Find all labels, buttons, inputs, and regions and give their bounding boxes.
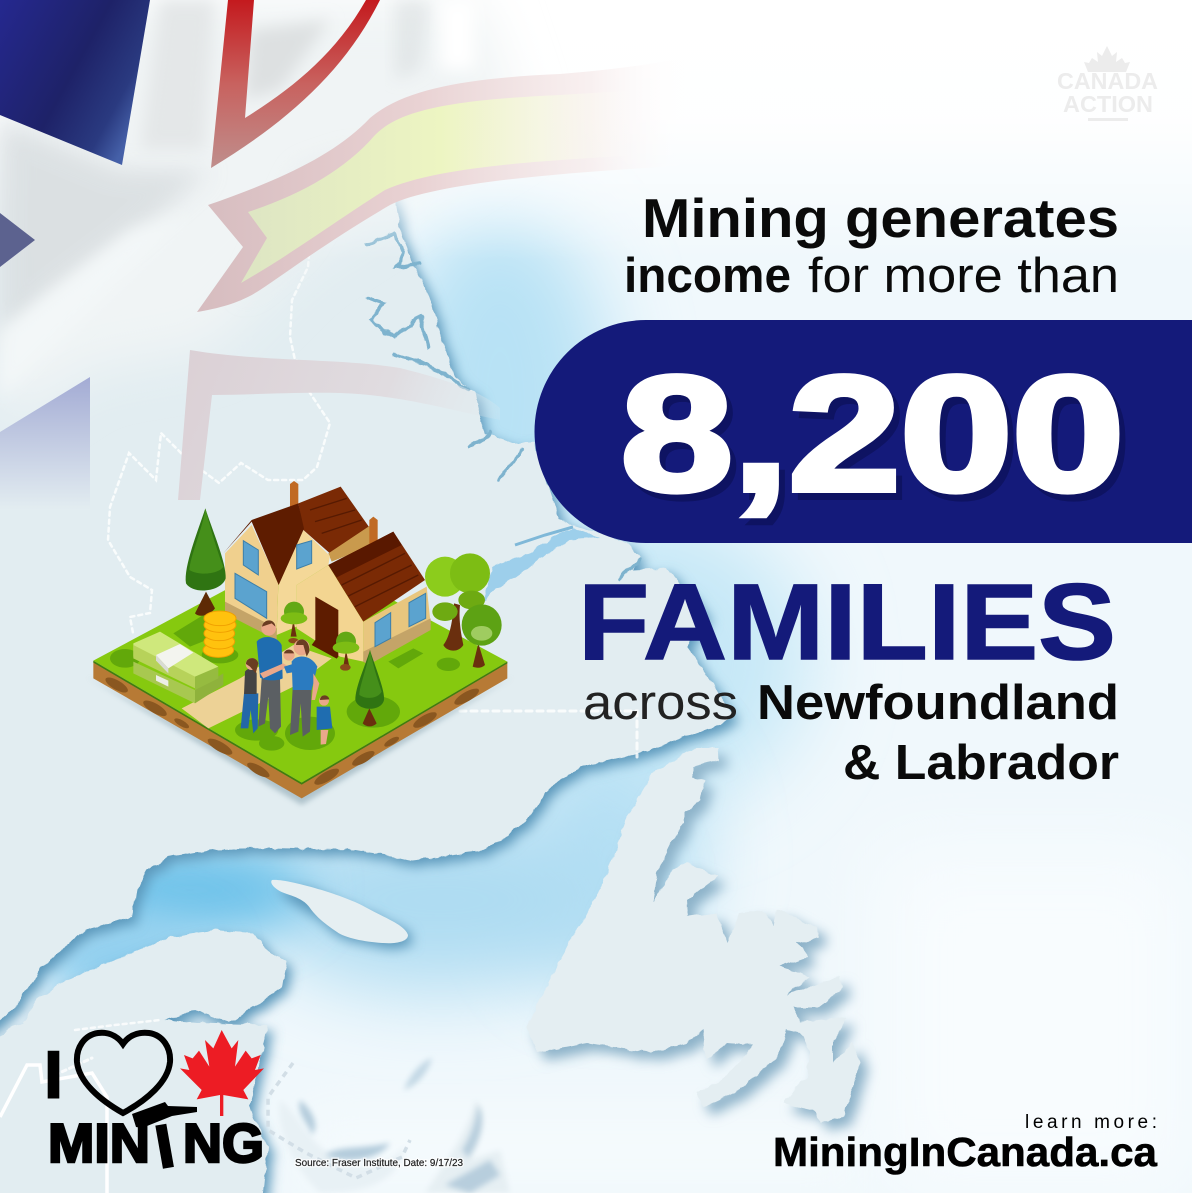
logo word: MINING: MIN: [48, 1112, 150, 1174]
icon: heart outline: [77, 1033, 170, 1113]
child: [317, 695, 332, 745]
tree: small shrubs: [281, 602, 359, 671]
gold coins: [203, 611, 236, 657]
heading: Mining generates income for more than: for more than: [808, 249, 1119, 303]
tree: left conifer: [186, 508, 226, 616]
map: Newfoundland island: [527, 747, 860, 1123]
icon: pickaxe head: [132, 1102, 197, 1128]
lawn shade patches: [110, 615, 460, 751]
map: Prince Edward Island and Nova Scotia: [279, 1058, 510, 1193]
map: Lake Melville inlet: [483, 527, 600, 603]
house: [223, 481, 431, 665]
roof shingle lines: [310, 498, 418, 607]
map: Anticosti island: [271, 880, 408, 943]
chimneys: [290, 481, 298, 511]
heading: Mining generates income for more than: income: [624, 249, 791, 303]
windows: [235, 541, 426, 647]
text: across Newfoundland and Labrador: Newfoundland: [757, 676, 1119, 730]
map: dashed provincial borders: [55, 63, 637, 1075]
text: across Newfoundland and Labrador: across: [583, 676, 738, 730]
heading: Mining generates income for more than: Mining generates: [642, 187, 1119, 249]
logo word: MINING: NG: [183, 1112, 264, 1174]
source note: Source: Fraser Institute, Date: 9/17/23: [295, 1157, 463, 1169]
flag: navy panel: [0, 0, 150, 165]
map: white roads near logo: [0, 1065, 107, 1193]
illustration: isometric house with family: [87, 481, 513, 805]
logo word: MINING: I: [151, 1112, 179, 1181]
logo: I love mining: [45, 1030, 264, 1181]
watermark: Canada Action logo: CANADA: [1057, 68, 1158, 94]
door: [312, 597, 338, 659]
flag: red trident band: [211, 0, 380, 168]
flag: white waves: [0, 0, 1192, 430]
ground shadow: [87, 677, 513, 805]
text: across Newfoundland and Labrador: & Labrador: [843, 736, 1119, 790]
call to action: learn more: learn more:: [1025, 1112, 1157, 1133]
path: [182, 645, 332, 728]
flag: pink bracket: [178, 350, 500, 500]
tree: front conifer: [355, 650, 384, 726]
map: land shadows: [0, 0, 738, 1193]
heading: FAMILIES: FAMILIES: [578, 561, 1116, 682]
rear roof: [298, 487, 370, 553]
watermark: Canada Action logo: [1057, 46, 1158, 121]
map: maritime dashed border: [268, 1063, 410, 1178]
front roofs: [223, 503, 304, 585]
source note: Source: Fraser Institute, Date: 9/17/23: [295, 1157, 463, 1169]
cash stacks: [133, 632, 223, 703]
watermark: Canada Action logo: ACTION: [1063, 91, 1153, 117]
girl: [241, 658, 258, 733]
heading: Mining generates income for more than: [624, 187, 1119, 303]
logo word: I: I: [45, 1038, 62, 1111]
map: Labrador and Quebec land: [0, 0, 733, 1047]
stone footing: [225, 602, 431, 665]
mother: [290, 639, 319, 737]
tree: right deciduous group: [425, 553, 502, 668]
lawn: [93, 550, 507, 783]
flag: yellow ribbon fill: [241, 90, 640, 283]
father: [257, 620, 288, 733]
map: Gaspe and New Brunswick land: [0, 930, 287, 1193]
icon: red maple leaf: [180, 1030, 264, 1116]
flag: pink ribbon outline: [197, 55, 700, 312]
flag: lavender triangle: [0, 377, 90, 510]
panel: navy pill with 8,200: [534, 320, 1192, 543]
map: Newfoundland shadow: [535, 755, 868, 1131]
soil edge: [93, 662, 507, 798]
call to action: learn more: MiningInCanada.ca: [773, 1129, 1158, 1175]
walls: [225, 525, 278, 632]
flag: small navy triangle: [0, 213, 35, 267]
map: fjords along the coast: [112, 113, 640, 578]
text: across Newfoundland and Labrador: [583, 676, 1119, 790]
number shadow: 8,200: [627, 349, 1130, 532]
number: 8,200: 8,200: [621, 342, 1124, 525]
logo word: MINING: [48, 1112, 264, 1181]
family: [241, 620, 332, 745]
baby: [283, 649, 297, 673]
